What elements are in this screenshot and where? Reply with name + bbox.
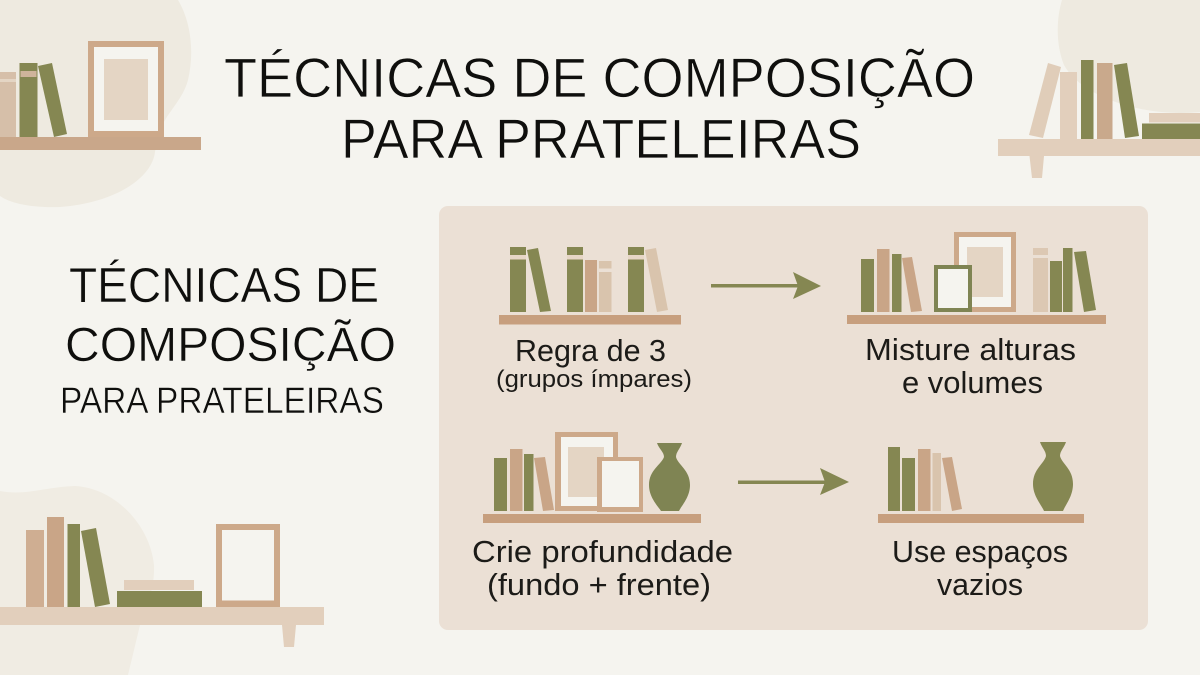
technique 2: mixed heights shelf — [847, 232, 1106, 324]
label: rule of three: (grupos ímpares) — [496, 366, 692, 393]
label: use empty spaces: Use espaços — [892, 534, 1068, 569]
label: create depth: Crie profundidade — [472, 534, 733, 569]
left heading — [60, 259, 396, 421]
label: use empty spaces — [892, 534, 1068, 602]
technique 3: depth shelf — [483, 432, 701, 523]
label: rule of three — [496, 333, 692, 393]
decoration: bottom-left shelf — [0, 486, 324, 675]
left heading: TÉCNICAS DE — [69, 259, 379, 313]
decoration: top-right shelf — [998, 0, 1200, 178]
label: use empty spaces: vazios — [937, 567, 1023, 602]
label: create depth — [472, 534, 733, 602]
decoration: top-left shelf — [0, 0, 201, 207]
label: mix heights — [865, 332, 1076, 400]
label: mix heights: Misture alturas — [865, 332, 1076, 367]
label: mix heights: e volumes — [902, 365, 1043, 400]
label: create depth: (fundo + frente) — [487, 567, 711, 602]
arrow: bottom row — [738, 468, 849, 495]
left heading: PARA PRATELEIRAS — [60, 380, 384, 421]
label: rule of three: Regra de 3 — [515, 333, 666, 368]
panel: techniques — [439, 206, 1148, 630]
main title: PARA PRATELEIRAS — [341, 107, 861, 170]
technique 1: rule of three shelf — [499, 247, 681, 324]
left heading: COMPOSIÇÃO — [65, 318, 396, 372]
arrow: top row — [711, 272, 821, 299]
technique 4: empty space shelf — [878, 442, 1084, 523]
main title: TÉCNICAS DE COMPOSIÇÃO — [224, 46, 975, 109]
main title — [224, 46, 975, 170]
